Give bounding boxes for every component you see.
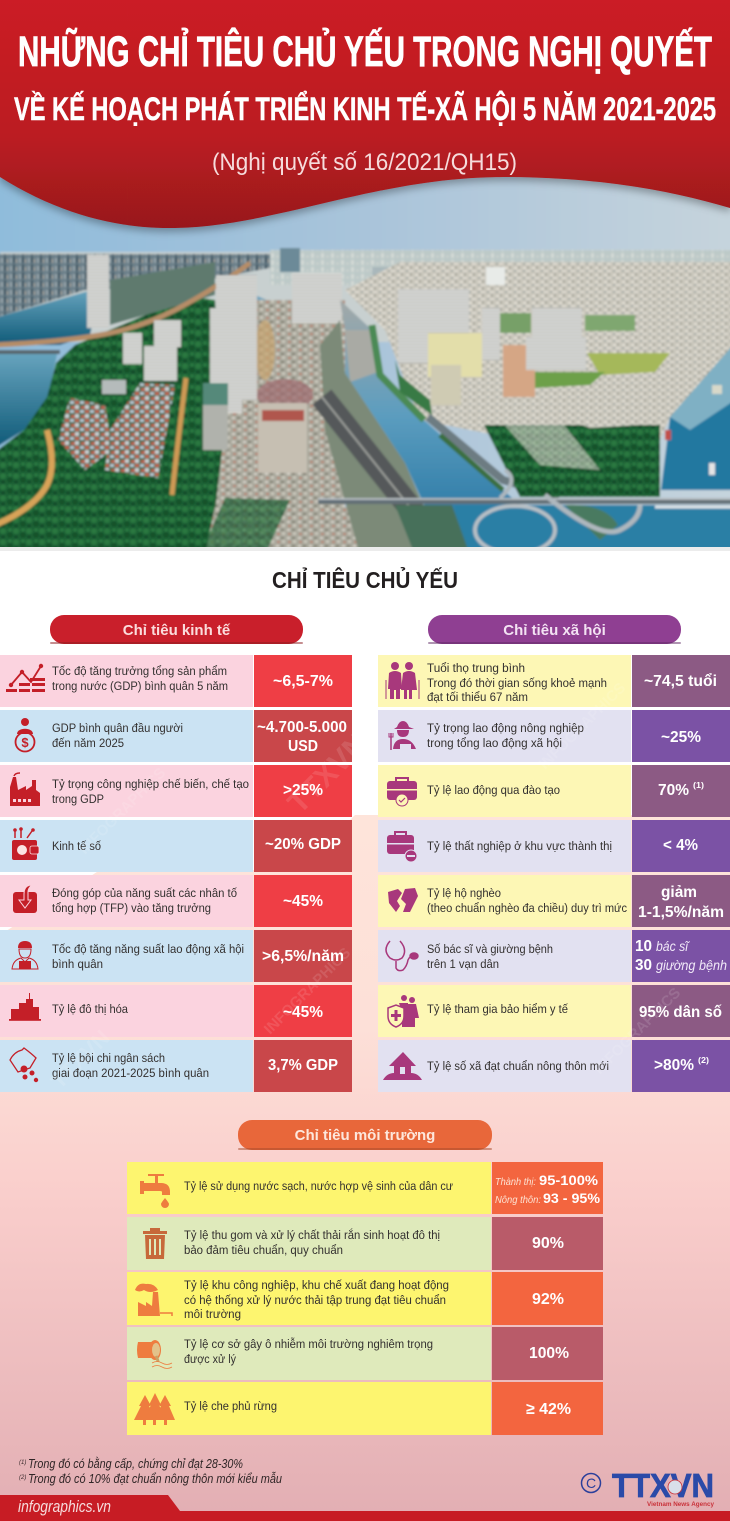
row: unemployment: < 4% bbox=[663, 837, 698, 854]
footnotes: Trong đó có bằng cấp, chứng chỉ đạt 28-30% bbox=[28, 1456, 243, 1471]
row: manufacturing share bbox=[0, 765, 352, 817]
logo: TTXVN: TTXVN bbox=[612, 1467, 714, 1504]
row: urbanisation: ~45% bbox=[283, 1004, 323, 1021]
row: urbanisation: Tỷ lệ đô thị hóa bbox=[52, 1002, 128, 1016]
row: agri labour: ~25% bbox=[661, 729, 701, 746]
row: manufacturing share: >25% bbox=[283, 782, 323, 799]
logo: TTXVN: Vietnam News Agency bbox=[647, 1501, 714, 1508]
row: budget deficit: giai đoạn 2021-2025 bình quân bbox=[52, 1066, 209, 1080]
row: GDP per capita: USD bbox=[288, 738, 318, 755]
row: GDP per capita: đến năm 2025 bbox=[52, 736, 124, 750]
icon: digital wallet bbox=[12, 827, 39, 860]
row: trained labour: Tỷ lệ lao động qua đào tạo bbox=[427, 783, 560, 797]
row: new rural communes: (2) bbox=[698, 1056, 709, 1065]
row: GDP growth: ~6,5-7% bbox=[273, 673, 333, 690]
row: GDP growth bbox=[0, 655, 352, 707]
row: digital economy: ~20% GDP bbox=[265, 836, 341, 853]
logo: TTXVN bbox=[582, 1467, 714, 1508]
row: doctors and beds: Số bác sĩ và giường bệnh bbox=[427, 942, 553, 956]
icon: forest bbox=[134, 1393, 175, 1425]
row: doctors and beds bbox=[378, 930, 730, 982]
section heading: CHỈ TIÊU CHỦ YẾU bbox=[272, 565, 458, 593]
economic pill heading bbox=[50, 615, 303, 644]
icon: broken piggy bank bbox=[10, 1048, 38, 1082]
row: health insurance: Tỷ lệ tham gia bảo hiểm y tế bbox=[427, 1002, 568, 1016]
row: life expectancy: Trong đó thời gian sống khoẻ mạnh bbox=[427, 676, 607, 690]
row: doctors and beds: 10 bbox=[635, 938, 652, 955]
footnotes: Trong đó có 10% đạt chuẩn nông thôn mới kiểu mẫu bbox=[28, 1472, 282, 1486]
row: labour productivity: Tốc độ tăng năng suất lao động xã hội bbox=[52, 942, 244, 956]
row: budget deficit: 3,7% GDP bbox=[268, 1057, 338, 1074]
footer bar bbox=[0, 1495, 730, 1521]
row: budget deficit bbox=[0, 1040, 352, 1092]
row: health insurance bbox=[378, 985, 730, 1037]
panel: economic indicators bbox=[0, 615, 352, 1092]
row: poverty bbox=[378, 875, 730, 927]
row: trained labour: (1) bbox=[693, 781, 704, 790]
icon: worker bbox=[12, 941, 38, 969]
row: agri labour: trong tổng lao động xã hội bbox=[427, 736, 562, 750]
watermarks bbox=[46, 679, 684, 1094]
row: trained labour bbox=[378, 765, 730, 817]
row: life expectancy: Tuổi thọ trung bình bbox=[427, 661, 525, 675]
row: life expectancy: ~74,5 tuổi bbox=[644, 672, 717, 690]
row: manufacturing share: trong GDP bbox=[52, 792, 104, 806]
footnotes bbox=[19, 1456, 282, 1486]
row: manufacturing share: Tỷ trọng công nghiệp chế biến, chế tạo bbox=[52, 777, 249, 791]
city photograph bbox=[0, 170, 730, 555]
row: forest cover: ≥ 42% bbox=[526, 1401, 571, 1418]
icon: briefcase blocked bbox=[387, 832, 417, 862]
watermarks: TTXVN bbox=[282, 727, 374, 820]
subtitle: (Nghị quyết số 16/2021/QH15) bbox=[212, 149, 517, 176]
row: GDP per capita bbox=[0, 710, 352, 762]
row: solid waste: bảo đảm tiêu chuẩn, quy chuẩn bbox=[184, 1243, 343, 1257]
row: wastewater treatment bbox=[127, 1272, 603, 1325]
row: clean water: 93 - 95% bbox=[543, 1190, 601, 1206]
row: polluting facilities: được xử lý bbox=[184, 1352, 237, 1366]
economic pill heading: Chỉ tiêu kinh tế bbox=[123, 622, 231, 639]
watermarks: INFOGRAPHICS bbox=[536, 679, 629, 773]
header banner bbox=[0, 0, 730, 228]
icon: discharge pipe bbox=[137, 1340, 172, 1368]
row: GDP per capita: GDP bình quân đầu người bbox=[52, 721, 183, 735]
row: urbanisation bbox=[0, 985, 352, 1037]
row: GDP per capita: ~4.700-5.000 bbox=[257, 719, 347, 736]
watermarks: TTXVN bbox=[46, 1025, 115, 1094]
icon: trash bin bbox=[143, 1228, 167, 1259]
row: solid waste bbox=[127, 1217, 603, 1270]
row: poverty: 1-1,5%/năm bbox=[638, 904, 724, 921]
row: agri labour bbox=[378, 710, 730, 762]
row: digital economy bbox=[0, 820, 352, 872]
row: life expectancy: đạt tối thiểu 67 năm bbox=[427, 690, 528, 704]
row: forest cover bbox=[127, 1382, 603, 1435]
row: forest cover: Tỷ lệ che phủ rừng bbox=[184, 1399, 277, 1413]
row: unemployment bbox=[378, 820, 730, 872]
icon: farmer bbox=[389, 721, 416, 750]
row: labour productivity: bình quân bbox=[52, 957, 103, 971]
row: agri labour: Tỷ trọng lao động nông nghiệp bbox=[427, 721, 584, 735]
icon: stethoscope bbox=[386, 941, 418, 971]
row: trained labour: 70% bbox=[658, 782, 689, 799]
row: clean water: Nông thôn: bbox=[495, 1194, 541, 1206]
icon: water tap bbox=[140, 1174, 170, 1208]
row: poverty: (theo chuẩn nghèo đa chiều) duy trì mức bbox=[427, 901, 627, 915]
panel: social indicators bbox=[378, 615, 730, 1092]
icon: arrow into box bbox=[13, 885, 37, 913]
row: clean water: Thành thị: bbox=[495, 1176, 536, 1188]
footnotes: (2) bbox=[19, 1475, 26, 1481]
row: GDP growth: Tốc độ tăng trưởng tổng sản phẩm bbox=[52, 664, 227, 678]
icon: family shield bbox=[388, 995, 419, 1027]
icon: money person bbox=[16, 718, 34, 752]
icon: factory bbox=[10, 773, 40, 806]
watermarks: INFOGRAPHICS bbox=[76, 764, 169, 858]
watermarks: INFOGRAPHICS bbox=[591, 984, 684, 1078]
title bbox=[14, 27, 716, 127]
row: GDP growth: trong nước (GDP) bình quân 5 năm bbox=[52, 679, 228, 693]
row: life expectancy bbox=[378, 655, 730, 707]
icon: broken heart bbox=[388, 888, 418, 912]
row: solid waste: Tỷ lệ thu gom và xử lý chất thải rắn sinh hoạt đô thị bbox=[184, 1227, 440, 1242]
row: polluting facilities bbox=[127, 1327, 603, 1380]
row: wastewater treatment: môi trường bbox=[184, 1307, 241, 1321]
row: wastewater treatment: có hệ thống xử lý nước thải tập trung đạt tiêu chuẩn bbox=[184, 1293, 446, 1307]
row: solid waste: 90% bbox=[532, 1235, 564, 1252]
icon: city bbox=[9, 993, 41, 1021]
icon: rural house bbox=[383, 1052, 422, 1080]
row: wastewater treatment: Tỷ lệ khu công nghiệp, khu chế xuất đang hoạt động bbox=[184, 1278, 449, 1292]
row: unemployment: Tỷ lệ thất nghiệp ở khu vực thành thị bbox=[427, 839, 612, 853]
row: clean water: Tỷ lệ sử dụng nước sạch, nước hợp vệ sinh của dân cư bbox=[184, 1179, 453, 1193]
row: doctors and beds: giường bệnh bbox=[656, 958, 727, 973]
icon: growth chart bbox=[6, 664, 45, 692]
row: poverty: giảm bbox=[661, 884, 697, 901]
footnotes: (1) bbox=[19, 1460, 26, 1466]
icon: money person: $ bbox=[21, 735, 29, 750]
row: new rural communes bbox=[378, 1040, 730, 1092]
row: TFP contribution: Đóng góp của năng suất các nhân tố bbox=[52, 886, 237, 900]
environment pill heading: Chỉ tiêu môi trường bbox=[295, 1127, 435, 1144]
row: TFP contribution bbox=[0, 875, 352, 927]
panel: environment indicators bbox=[127, 1120, 603, 1435]
footer bar: infographics.vn bbox=[18, 1497, 111, 1516]
icon: polluting factory bbox=[135, 1284, 172, 1316]
row: clean water: 95-100% bbox=[539, 1172, 599, 1188]
social pill heading bbox=[428, 615, 681, 644]
social pill heading: Chỉ tiêu xã hội bbox=[503, 622, 606, 639]
row: TFP contribution: tổng hợp (TFP) vào tăng trưởng bbox=[52, 901, 211, 915]
row: new rural communes: >80% bbox=[654, 1057, 694, 1074]
row: new rural communes: Tỷ lệ số xã đạt chuẩn nông thôn mới bbox=[427, 1059, 609, 1073]
row: labour productivity bbox=[0, 930, 352, 982]
row: budget deficit: Tỷ lệ bội chi ngân sách bbox=[52, 1051, 165, 1065]
row: digital economy: Kinh tế số bbox=[52, 839, 101, 853]
row: labour productivity: >6,5%/năm bbox=[262, 948, 344, 965]
row: polluting facilities: Tỷ lệ cơ sở gây ô nhiễm môi trường nghiêm trọng bbox=[184, 1336, 433, 1351]
row: TFP contribution: ~45% bbox=[283, 893, 323, 910]
row: health insurance: 95% dân số bbox=[639, 1004, 722, 1021]
logo: TTXVN: C bbox=[586, 1475, 596, 1491]
row: doctors and beds: trên 1 vạn dân bbox=[427, 957, 499, 971]
icon: briefcase check bbox=[387, 778, 417, 806]
row: polluting facilities: 100% bbox=[529, 1345, 569, 1362]
row: doctors and beds: 30 bbox=[635, 957, 652, 974]
icon: elderly couple bbox=[386, 662, 419, 699]
row: doctors and beds: bác sĩ bbox=[656, 939, 690, 954]
row: poverty: Tỷ lệ hộ nghèo bbox=[427, 886, 501, 900]
row: clean water bbox=[127, 1162, 603, 1214]
watermarks: INFOGRAPHICS bbox=[261, 944, 354, 1038]
photo bottom soft shadow bbox=[0, 547, 730, 551]
row: wastewater treatment: 92% bbox=[532, 1291, 564, 1308]
environment pill heading bbox=[238, 1120, 492, 1150]
